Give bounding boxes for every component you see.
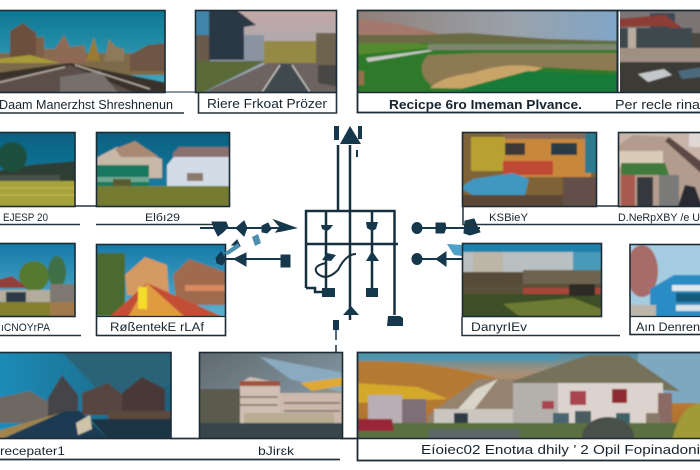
- caption: DanyrIEv: [471, 322, 527, 334]
- panel: bottom-right large house photo with caption: [340, 350, 700, 460]
- caption: Daam Manerzhst Shreshnenun: [0, 98, 173, 112]
- panel: left field with tree photo: [0, 130, 97, 224]
- right arrow row: lower: [412, 252, 462, 266]
- panel: glowing red roof photo with caption: [94, 242, 228, 336]
- caption: KSBieY: [489, 212, 529, 224]
- photo: apartment blocks: [200, 353, 342, 438]
- photo: large white house at sunset: [358, 353, 700, 438]
- caption: per recle: Per recle rina: [615, 98, 700, 112]
- left arrow row: upper: [200, 220, 296, 236]
- panel: top road photo with caption: Riere Frkoat Prözer: [207, 97, 327, 111]
- caption: ıCNOYrPA: [1, 322, 51, 334]
- caption box: [198, 92, 336, 113]
- photo: red-roof building with cars: [620, 11, 700, 92]
- small blue fragments: [224, 234, 261, 255]
- node shapes: [321, 126, 403, 340]
- caption: recepater1: [0, 444, 65, 458]
- photo: blue modern house and red tree: [630, 245, 700, 316]
- photo: village under streaked blue sky: [0, 353, 170, 438]
- panel: top-left street photo with caption: [0, 8, 195, 113]
- panel: top road photo with caption: [193, 8, 339, 113]
- panel: white houses and green truck photo: [94, 130, 232, 224]
- photo: lake and green meadow: [358, 11, 616, 92]
- photo: orange house with blue car: [463, 133, 596, 206]
- photo: road between trees and dark house: [196, 11, 336, 92]
- panel: blue car and orange building photo: [460, 130, 700, 224]
- left arrow row: lower: [216, 240, 290, 267]
- panel: bottom-left village street photo with caption: [0, 350, 340, 460]
- panel: left garden photo: [0, 241, 81, 336]
- caption: Eíoiec02 Enotиa dhily ’ 2 Opil Fopinadoni: [421, 443, 700, 457]
- photo: storefront: [619, 133, 700, 206]
- panel: blue building photo: [626, 242, 700, 334]
- caption: Elбı29: [145, 212, 180, 224]
- panel: industrial park photo with caption: [460, 241, 620, 336]
- photo: orange roofs: [97, 245, 225, 316]
- photo: trees and parked car: [0, 244, 74, 316]
- caption: D.NeRpXBY /e U: [618, 212, 700, 224]
- photo: city road under teal sky: [0, 11, 164, 92]
- central flow diagram with arrows: [200, 126, 480, 340]
- caption: Aın Denren: [636, 322, 700, 334]
- photo: houses and truck: [97, 133, 229, 206]
- caption: EJESP 20: [3, 212, 48, 224]
- blue fragment: [447, 244, 464, 256]
- central grid frame: [306, 145, 398, 320]
- photo: factory across field: [463, 244, 601, 316]
- panel: top-right wide lake and building photos with caption: [355, 8, 700, 112]
- panel: apartments at sunset photo with caption: [197, 345, 357, 458]
- caption: bJirɛk: [258, 444, 295, 458]
- caption: recipe: Recicpe 6ro Imeman Plvance.: [389, 98, 582, 112]
- panel: shopfront with green awning photo: [616, 130, 700, 224]
- photo: tree over yellow-green field: [0, 133, 74, 206]
- right arrow row: upper: [412, 219, 480, 235]
- caption: RøßentekE rLAf: [110, 322, 205, 334]
